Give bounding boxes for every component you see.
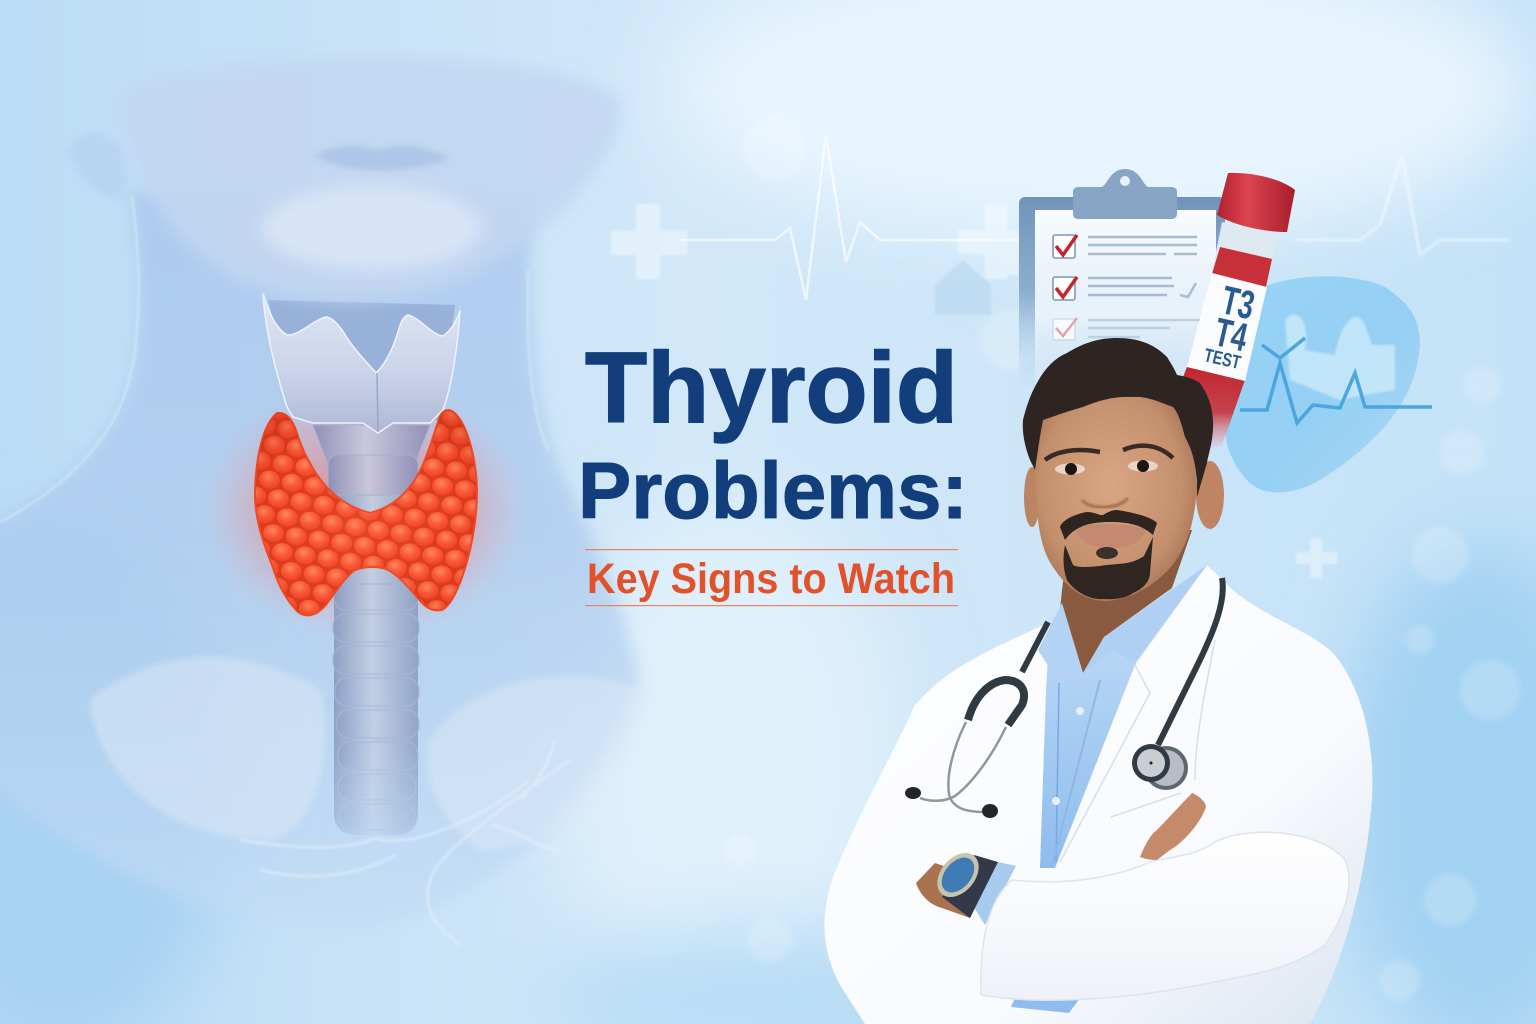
forearm and hand [916,793,1349,1000]
eyebrows [1045,450,1100,460]
clipboard clip [1073,169,1177,219]
label text: T4 [1210,310,1252,360]
T3 T4 test tube [1178,173,1295,450]
subtitle rule top [585,549,958,550]
cartilage backdrop [268,300,455,420]
ECG line and medical crosses [611,135,1510,578]
neck [1060,530,1192,673]
shirt lower [1011,980,1086,1013]
head [1023,338,1224,601]
blue thyroid shield with pulse [1226,276,1432,492]
collarbone and lungs [90,657,326,840]
checklist rows [1053,235,1200,340]
clipboard checklist [1019,169,1225,390]
thyroid anatomy [200,293,530,835]
stethoscope [905,578,1223,818]
label text: TEST [1202,345,1243,374]
red glow [200,380,530,640]
jaw and chin [119,58,621,301]
lips and moustache [1073,524,1147,548]
title: Problems: Problems: [578,446,968,535]
hair [1023,338,1213,497]
label text [1202,278,1258,374]
thyroid cartilage [263,293,460,433]
watch [929,845,998,918]
title block [578,332,968,606]
title: Thyroid: Thyroid [585,332,958,444]
collar [1038,603,1083,683]
subtitle: Key Signs to Watch [587,555,955,603]
lab coat [824,565,1372,1024]
coat details [1060,640,1215,862]
ear lobe [68,132,127,200]
thyroid gland [255,410,477,615]
subtitle rule bottom [585,605,958,606]
label text: T3 [1217,278,1258,328]
shirt buttons [1052,707,1084,805]
trachea [313,425,430,835]
beard [1064,537,1153,599]
shirt [1038,640,1138,870]
eyes [1055,464,1085,474]
bronchial branches [240,740,570,945]
nose [1082,498,1128,507]
neck and shoulders silhouette [0,132,650,945]
tube cap [1217,173,1295,232]
doctor [824,338,1372,1024]
